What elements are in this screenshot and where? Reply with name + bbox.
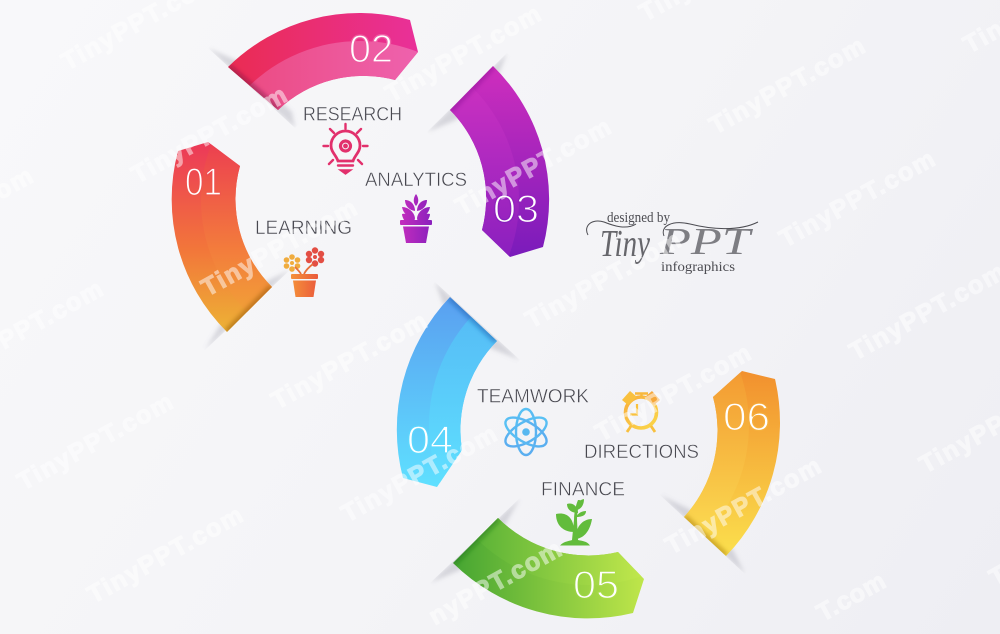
icon: sprout bbox=[556, 499, 592, 546]
watermark: TinyPPT.com repeated: nyPPT.com bbox=[424, 535, 566, 631]
segment 03 bbox=[450, 66, 550, 257]
watermark: TinyPPT.com repeated: TinyPPT.com bbox=[661, 452, 826, 560]
watermark: TinyPPT.com repeated: T.com bbox=[812, 567, 890, 627]
icon: flowers in pot bbox=[284, 247, 324, 297]
watermark: TinyPPT.com repeated: TinyPPT.com bbox=[591, 339, 756, 447]
watermark: TinyPPT.com repeated: TinyPPT.com bbox=[267, 307, 432, 415]
segment 01 bbox=[172, 142, 272, 332]
number 04: 04 bbox=[407, 419, 453, 462]
logo: designed by Tiny PPT infographics: PPT bbox=[659, 221, 754, 263]
icon: succulent in pot bbox=[400, 194, 432, 243]
label: learning: LEARNING bbox=[255, 217, 352, 239]
label: teamwork: TEAMWORK bbox=[477, 386, 589, 408]
logo: designed by Tiny PPT infographics: Tiny bbox=[600, 223, 650, 265]
number 06: 06 bbox=[723, 396, 770, 439]
number 03: 03 bbox=[493, 188, 539, 231]
watermark: TinyPPT.com repeated: TinyPPT.com bbox=[775, 145, 940, 253]
watermark: TinyPPT.com repeated: TinyPPT.com bbox=[521, 226, 686, 334]
watermark: TinyPPT.com repeated: TinyPPT.com bbox=[197, 194, 362, 302]
watermark: TinyPPT.com repeated: TinyPPT.com bbox=[705, 32, 870, 140]
segment 04 bbox=[396, 297, 497, 487]
logo: designed by Tiny PPT infographics bbox=[587, 210, 758, 275]
segment 05 bbox=[453, 518, 644, 618]
segment 06 bbox=[684, 371, 780, 556]
watermark: TinyPPT.com repeated: TinyPPT.com bbox=[451, 113, 616, 221]
label: analytics: ANALYTICS bbox=[365, 169, 467, 191]
watermark: TinyPPT.com repeated: TinyPPT.com bbox=[83, 501, 248, 609]
label: research: RESEARCH bbox=[303, 104, 402, 126]
watermark: TinyPPT.com repeated: TinyPPT.com bbox=[337, 420, 502, 528]
label: finance: FINANCE bbox=[541, 478, 625, 500]
number 05: 05 bbox=[573, 564, 619, 607]
label: directions: DIRECTIONS bbox=[584, 441, 699, 463]
logo: designed by Tiny PPT infographics: infographics bbox=[661, 260, 735, 275]
icon: atom bbox=[501, 409, 551, 455]
icon: alarm clock bbox=[622, 391, 660, 432]
watermark: TinyPPT.com repeated: TinyPPT.com bbox=[381, 0, 546, 108]
segment 02 bbox=[228, 13, 418, 110]
icon: light bulb with gear bbox=[324, 124, 368, 174]
number 02: 02 bbox=[349, 28, 393, 71]
logo: designed by Tiny PPT infographics: designed by bbox=[607, 210, 671, 226]
number 01: 01 bbox=[185, 161, 222, 204]
watermark: TinyPPT.com repeated: TinyPPT.com bbox=[127, 81, 292, 189]
watermark: TinyPPT.com repeated: TinyPPT.com bbox=[13, 388, 178, 496]
